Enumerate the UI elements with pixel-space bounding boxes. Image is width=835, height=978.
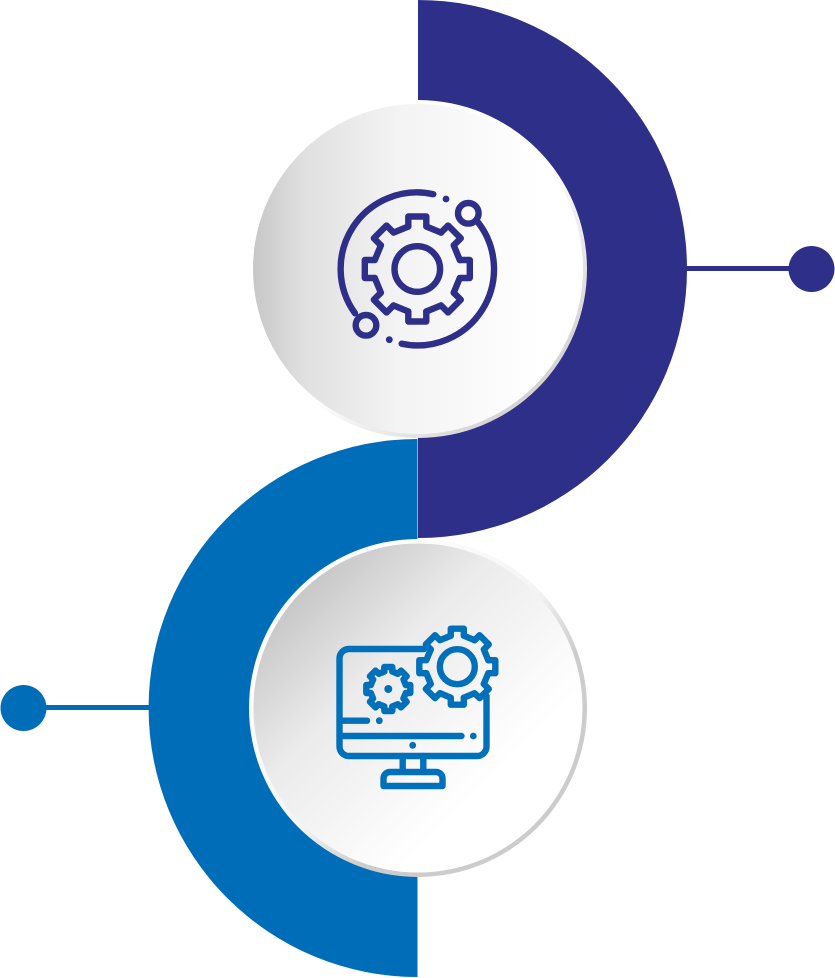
blue connector and dot	[0, 685, 150, 731]
top circle panel	[249, 100, 587, 438]
blue half ring	[149, 439, 418, 977]
bottom circle panel	[249, 539, 587, 877]
purple connector and dot	[686, 246, 834, 292]
icon: monitor with gears	[340, 628, 496, 786]
purple half ring	[418, 0, 687, 538]
small gear	[366, 667, 411, 711]
monitor stand	[384, 756, 442, 786]
large gear	[418, 628, 496, 706]
icon: gear with orbit	[341, 192, 494, 345]
monitor body	[340, 649, 486, 756]
